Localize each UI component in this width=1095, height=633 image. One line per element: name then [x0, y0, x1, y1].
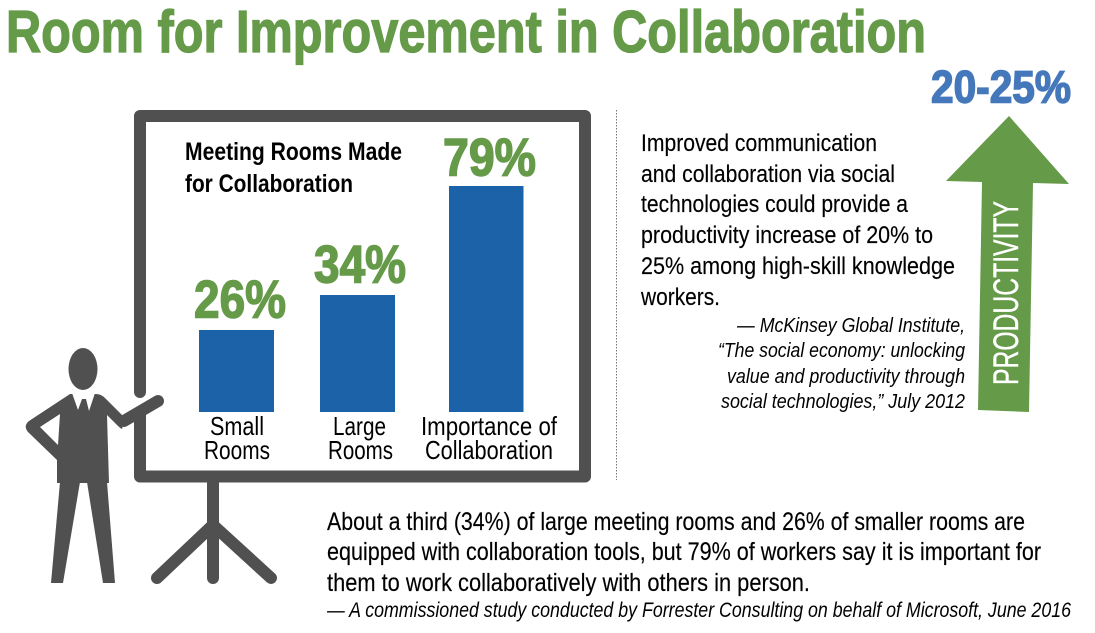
bar: importance of collaboration: 79%	[443, 128, 536, 188]
bar chart	[194, 128, 558, 465]
citation: McKinsey: “The social economy: unlocking	[718, 339, 966, 362]
bar: small rooms	[194, 270, 286, 465]
bar: small rooms: 26%	[194, 270, 286, 330]
board stand	[157, 480, 271, 578]
arrow: productivity: PRODUCTIVITY	[987, 201, 1026, 385]
bar: small rooms: Rooms	[204, 435, 270, 465]
chart heading: Meeting Rooms Made	[185, 138, 402, 166]
panel: presentation board	[140, 116, 585, 578]
text block: McKinsey quote: productivity increase of 20% to	[641, 222, 933, 249]
text block: Forrester finding: them to work collaboratively with others in person.	[327, 569, 810, 597]
bar: importance of collaboration: Importance of	[421, 411, 558, 441]
citation: McKinsey: value and productivity through	[727, 365, 965, 388]
stat: 20-25%: 20-25%	[931, 62, 1071, 112]
divider	[616, 110, 618, 480]
citation: McKinsey: — McKinsey Global Institute,	[736, 314, 965, 337]
text block: McKinsey quote: and collaboration via social	[641, 161, 895, 188]
text block: McKinsey quote: technologies could provide a	[641, 191, 908, 218]
text block: Forrester finding	[327, 508, 1041, 597]
text block: McKinsey quote: Improved communication	[641, 130, 877, 157]
bar: large rooms	[314, 236, 406, 465]
bar: large rooms: 34%	[314, 236, 406, 294]
text block: McKinsey quote	[640, 130, 955, 311]
text block: McKinsey quote: 25% among high-skill knowledge	[641, 253, 955, 280]
board frame	[140, 116, 585, 476]
citation: McKinsey	[718, 314, 966, 413]
bar: importance of collaboration	[421, 128, 558, 465]
chart heading: for Collaboration	[185, 170, 353, 198]
text block: McKinsey quote: workers.	[640, 284, 720, 311]
chart heading	[185, 138, 402, 198]
bar: large rooms: Rooms	[328, 435, 393, 465]
icon: presenter figure	[26, 348, 158, 583]
arrow: productivity	[946, 116, 1069, 412]
bar: small rooms: Small	[210, 411, 264, 441]
bar: large rooms: Large	[333, 411, 386, 441]
bar: importance of collaboration: Collaboration	[425, 435, 553, 465]
citation: McKinsey: social technologies,” July 2012	[721, 390, 966, 413]
